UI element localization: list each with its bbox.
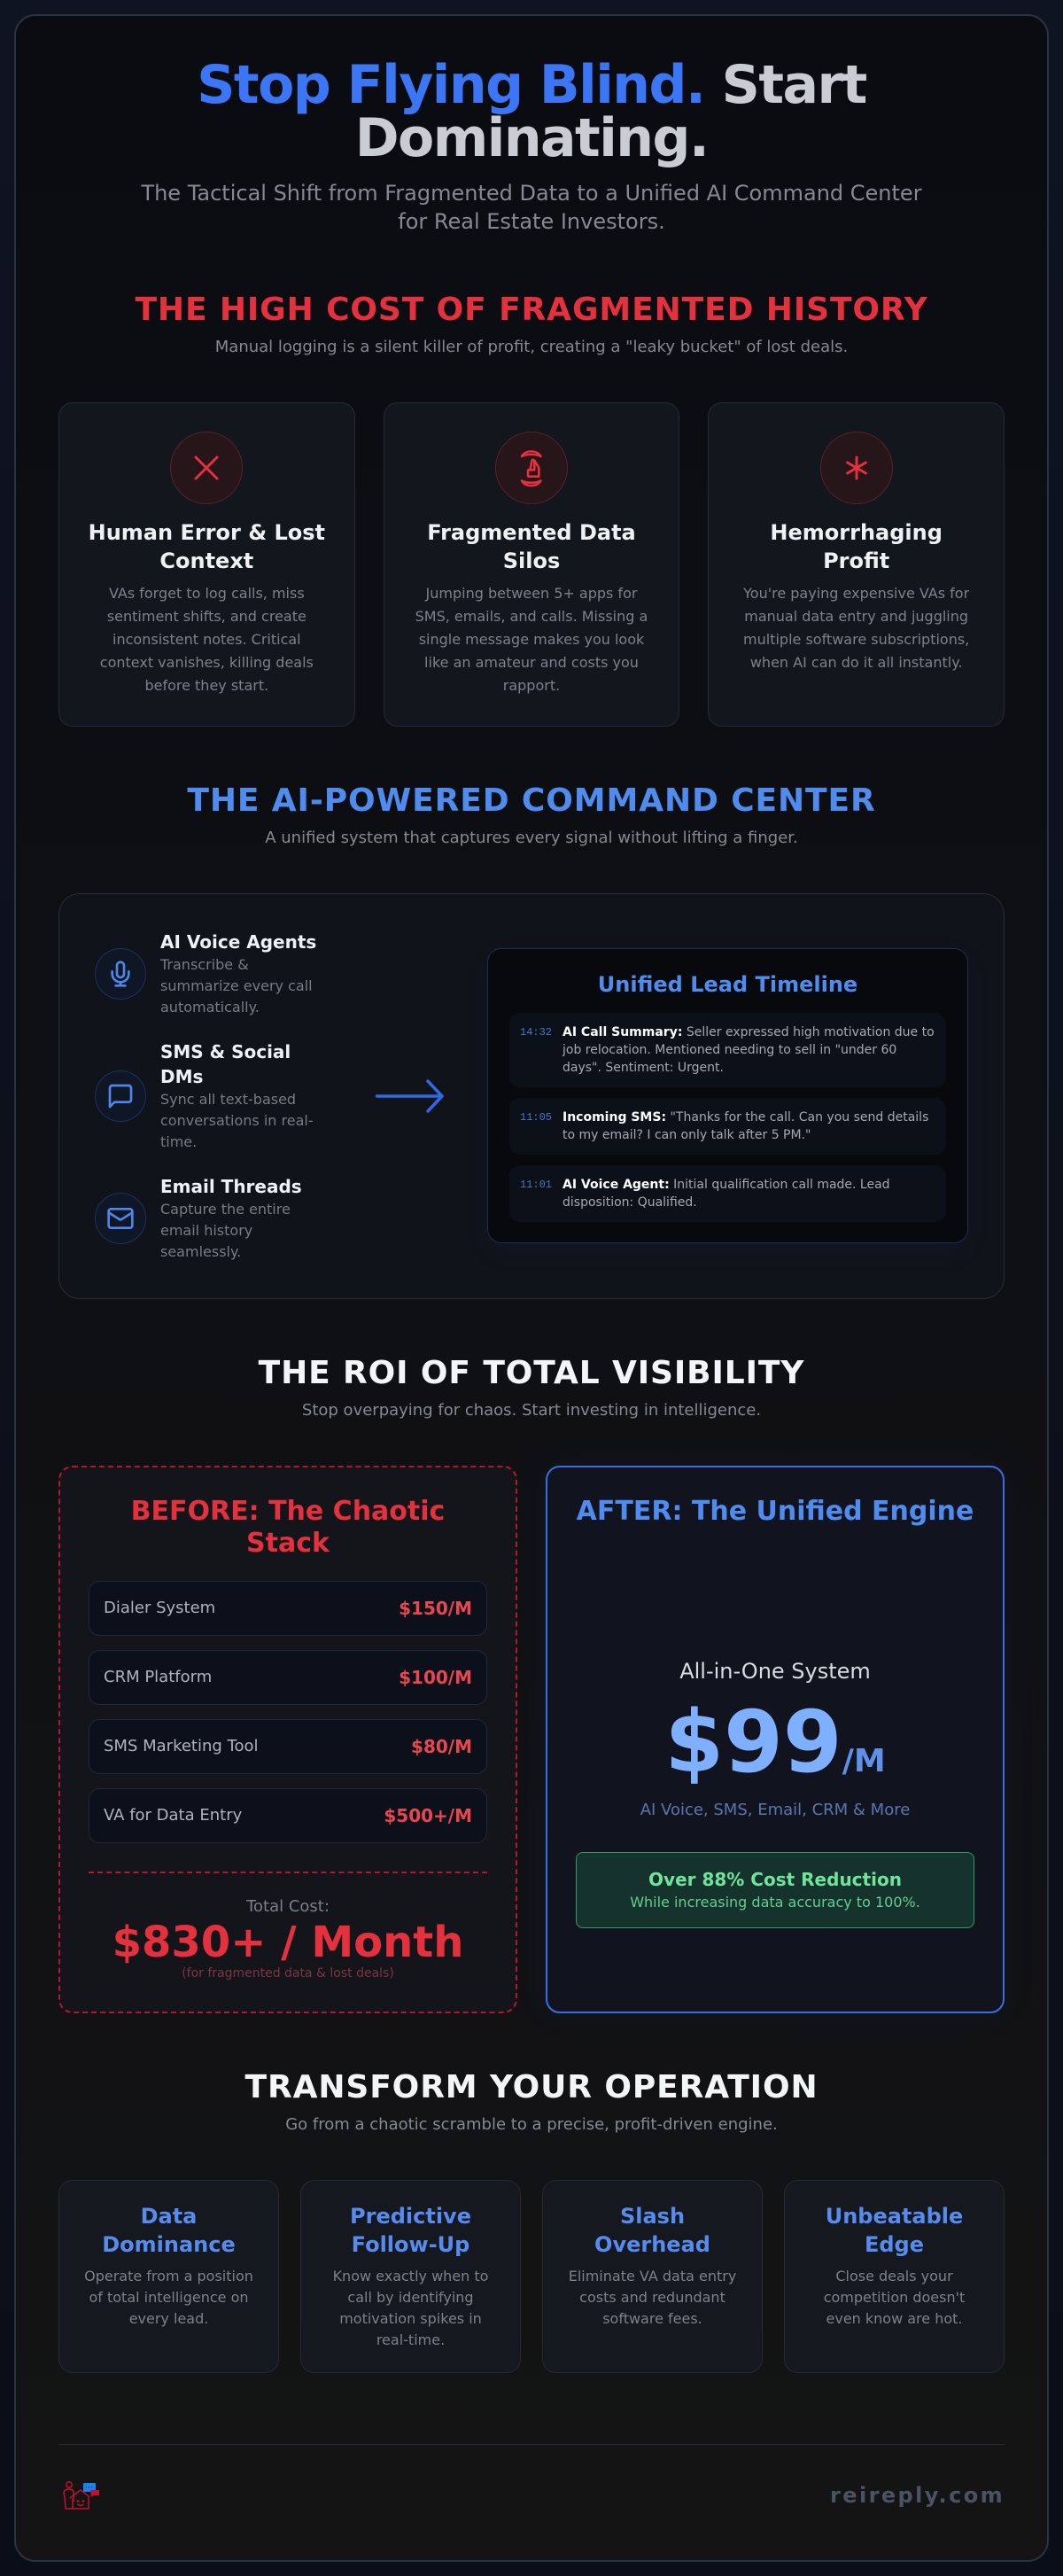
card heading: Fragmented Data	[427, 520, 636, 545]
benefit text	[824, 2268, 965, 2327]
benefit heading: Unbeatable	[826, 2204, 963, 2229]
subheading: command center: A unified system that captures every signal without lifting a finger.	[265, 829, 798, 847]
card text: VAs forget to log calls, miss	[109, 585, 305, 602]
after heading: AFTER: The Unified Engine	[577, 1496, 974, 1527]
cost row: sms: SMS Marketing Tool	[104, 1737, 259, 1755]
card text: rapport.	[503, 677, 560, 694]
savings detail: While increasing data accuracy to 100%.	[630, 1894, 920, 1911]
total note: (for fragmented data & lost deals)	[182, 1966, 394, 1981]
benefit text: real-time.	[376, 2331, 445, 2348]
benefit text	[569, 2268, 736, 2327]
timeline entry: call summary	[509, 1013, 946, 1087]
card text	[743, 585, 969, 671]
icon: fragmented lock	[495, 432, 568, 504]
source name: AI Voice Agents	[160, 931, 316, 953]
card text	[100, 585, 314, 694]
timeline heading: Unified Lead Timeline	[598, 972, 857, 997]
card text: You're paying expensive VAs for	[743, 585, 969, 602]
title: Stop Flying Blind. Start	[197, 54, 866, 116]
subtitle: The Tactical Shift from Fragmented Data to a Unified AI Command Center	[141, 181, 922, 206]
panel: unbeatable edge	[784, 2180, 1005, 2373]
before heading: BEFORE: The Chaotic	[131, 1496, 445, 1527]
card heading: Hemorrhaging	[770, 520, 943, 545]
total block	[89, 1872, 487, 1985]
benefit heading	[102, 2204, 236, 2257]
cost row: sms: $80/M	[411, 1736, 472, 1757]
footer brand: reireply.com	[830, 2483, 1005, 2508]
benefit text: even know are hot.	[826, 2310, 962, 2327]
cost row: va: VA for Data Entry	[104, 1806, 242, 1825]
benefit heading: Data	[141, 2204, 197, 2229]
panel: slash overhead	[542, 2180, 763, 2373]
source text: conversations in real-	[160, 1112, 314, 1129]
timeline entry: incoming sms	[509, 1098, 946, 1155]
timeline entry: call summary: days". Sentiment: Urgent.	[563, 1061, 724, 1075]
source text	[159, 956, 313, 1016]
benefit heading: Slash	[620, 2204, 685, 2229]
benefit text: Operate from a position	[84, 2268, 253, 2284]
card heading: Silos	[503, 549, 560, 573]
card text: single message makes you look	[419, 631, 644, 648]
source text: automatically.	[160, 999, 260, 1016]
total label: Total Cost:	[246, 1897, 330, 1916]
benefit heading: Predictive	[350, 2204, 471, 2229]
source name: SMS & Social	[160, 1041, 291, 1062]
savings callout	[576, 1852, 974, 1928]
benefit heading: Edge	[865, 2232, 924, 2257]
cost row: va: $500+/M	[384, 1805, 472, 1826]
timeline entry: call summary: AI Call Summary: Seller expressed high motivation due to	[563, 1025, 935, 1039]
subtitle: for Real Estate Investors.	[398, 209, 665, 234]
timeline entry: incoming sms: Incoming SMS: "Thanks for the call. Can you send details	[563, 1110, 928, 1125]
benefit text: competition doesn't	[824, 2289, 965, 2306]
panel: after	[546, 1466, 1005, 2013]
card text: before they start.	[144, 677, 268, 694]
subtitle	[141, 181, 922, 234]
source text: Capture the entire	[160, 1201, 291, 1218]
benefit text: of total intelligence on	[89, 2289, 248, 2306]
heading: transform: TRANSFORM YOUR OPERATION	[244, 2069, 819, 2105]
benefit text	[333, 2268, 488, 2348]
timeline entry: voice agent	[509, 1165, 946, 1222]
timeline entry: voice agent: 11:01	[520, 1179, 552, 1191]
source text: summarize every call	[160, 977, 313, 994]
timeline entry: incoming sms: 11:05	[520, 1111, 552, 1124]
cost row: sms	[89, 1719, 487, 1774]
benefit text	[84, 2268, 253, 2327]
panel: hemorrhaging profit	[708, 402, 1005, 727]
icon: microphone	[95, 948, 146, 1000]
icon: x mark	[170, 432, 243, 504]
timeline entry: call summary: 14:32	[520, 1026, 552, 1039]
card text: Jumping between 5+ apps for	[426, 585, 637, 602]
source name: DMs	[160, 1066, 203, 1087]
source: email threads	[95, 1176, 302, 1260]
system label: All-in-One System	[679, 1659, 871, 1684]
subheading: transform: Go from a chaotic scramble to a precise, profit-driven engine.	[285, 2115, 778, 2134]
cost row: dialer: Dialer System	[104, 1599, 215, 1617]
price: $99/M	[664, 1693, 886, 1792]
source text: Transcribe &	[160, 956, 249, 973]
benefit text: Eliminate VA data entry	[569, 2268, 736, 2284]
timeline entry: incoming sms: to my email? I can only talk after 5 PM."	[563, 1128, 811, 1142]
source text: email history	[160, 1222, 252, 1239]
title	[197, 54, 866, 169]
total value: $830+ / Month	[113, 1918, 463, 1967]
before heading: Stack	[246, 1528, 330, 1559]
card text: sentiment shifts, and create	[107, 608, 306, 625]
panel: data dominance	[58, 2180, 279, 2373]
panel: predictive follow-up	[300, 2180, 521, 2373]
card heading	[770, 520, 943, 573]
heading: ROI: THE ROI OF TOTAL VISIBILITY	[259, 1355, 804, 1391]
card text: manual data entry and juggling	[744, 608, 968, 625]
benefit text: every lead.	[129, 2310, 208, 2327]
cost row: dialer: $150/M	[399, 1598, 472, 1619]
source: SMS and social	[95, 1041, 314, 1150]
cost row: dialer	[89, 1581, 487, 1636]
includes: AI Voice, SMS, Email, CRM & More	[640, 1801, 910, 1819]
footer logo	[63, 2481, 99, 2510]
arrow	[376, 1079, 444, 1113]
card text: context vanishes, killing deals	[100, 654, 314, 671]
heading: high cost: THE HIGH COST OF FRAGMENTED HISTORY	[135, 292, 928, 328]
source name	[160, 1041, 291, 1087]
card text: SMS, emails, and calls. Missing a	[415, 608, 648, 625]
timeline entry: voice agent: AI Voice Agent: Initial qualification call made. Lead	[563, 1178, 890, 1192]
panel: human error	[58, 402, 355, 727]
benefit heading	[594, 2204, 710, 2257]
icon: chat bubble	[95, 1070, 146, 1122]
benefit text: software fees.	[602, 2310, 702, 2327]
card heading: Human Error & Lost	[89, 520, 325, 545]
timeline entry: call summary: job relocation. Mentioned needing to sell in "under 60	[563, 1043, 896, 1057]
source text	[160, 1091, 314, 1150]
panel: command center	[58, 893, 1005, 1299]
benefit text: motivation spikes in	[339, 2310, 482, 2327]
panel: data silos	[384, 402, 679, 727]
card heading	[427, 520, 636, 573]
source: AI voice agents	[95, 931, 316, 1016]
icon: asterisk	[820, 432, 893, 504]
card text: inconsistent notes. Critical	[113, 631, 301, 648]
subheading: high cost: Manual logging is a silent killer of profit, creating a "leaky bucket" of lost deals.	[215, 338, 848, 356]
source text	[160, 1201, 291, 1260]
subheading: ROI: Stop overpaying for chaos. Start investing in intelligence.	[302, 1401, 761, 1420]
benefit heading: Dominance	[102, 2232, 236, 2257]
source text: Sync all text-based	[160, 1091, 296, 1108]
card text: multiple software subscriptions,	[743, 631, 969, 648]
card text: like an amateur and costs you	[424, 654, 639, 671]
heading: command center: THE AI-POWERED COMMAND CENTER	[187, 782, 876, 819]
card text	[415, 585, 648, 694]
cost row: crm: CRM Platform	[104, 1668, 212, 1686]
cost row: crm: $100/M	[399, 1667, 472, 1688]
card heading: Context	[159, 549, 253, 573]
benefit text: Close deals your	[835, 2268, 953, 2284]
benefit heading	[350, 2204, 471, 2257]
card heading: Profit	[823, 549, 889, 573]
panel: unified lead timeline	[487, 948, 968, 1243]
benefit heading: Overhead	[594, 2232, 710, 2257]
card text: when AI can do it all instantly.	[750, 654, 962, 671]
panel: before	[58, 1466, 517, 2013]
benefit heading	[826, 2204, 963, 2257]
title: Dominating.	[355, 107, 708, 169]
source text: time.	[160, 1133, 197, 1150]
before heading	[131, 1496, 445, 1559]
benefit text: call by identifying	[347, 2289, 474, 2306]
cost row: va	[89, 1788, 487, 1843]
timeline entry: voice agent: disposition: Qualified.	[563, 1195, 697, 1210]
card heading	[89, 520, 325, 573]
cost row: crm	[89, 1650, 487, 1705]
benefit text: costs and redundant	[579, 2289, 725, 2306]
benefit heading: Follow-Up	[352, 2232, 469, 2257]
icon: envelope	[95, 1193, 146, 1244]
savings headline: Over 88% Cost Reduction	[648, 1869, 902, 1890]
source name: Email Threads	[160, 1176, 302, 1197]
source text: seamlessly.	[160, 1243, 241, 1260]
benefit text: Know exactly when to	[333, 2268, 488, 2284]
